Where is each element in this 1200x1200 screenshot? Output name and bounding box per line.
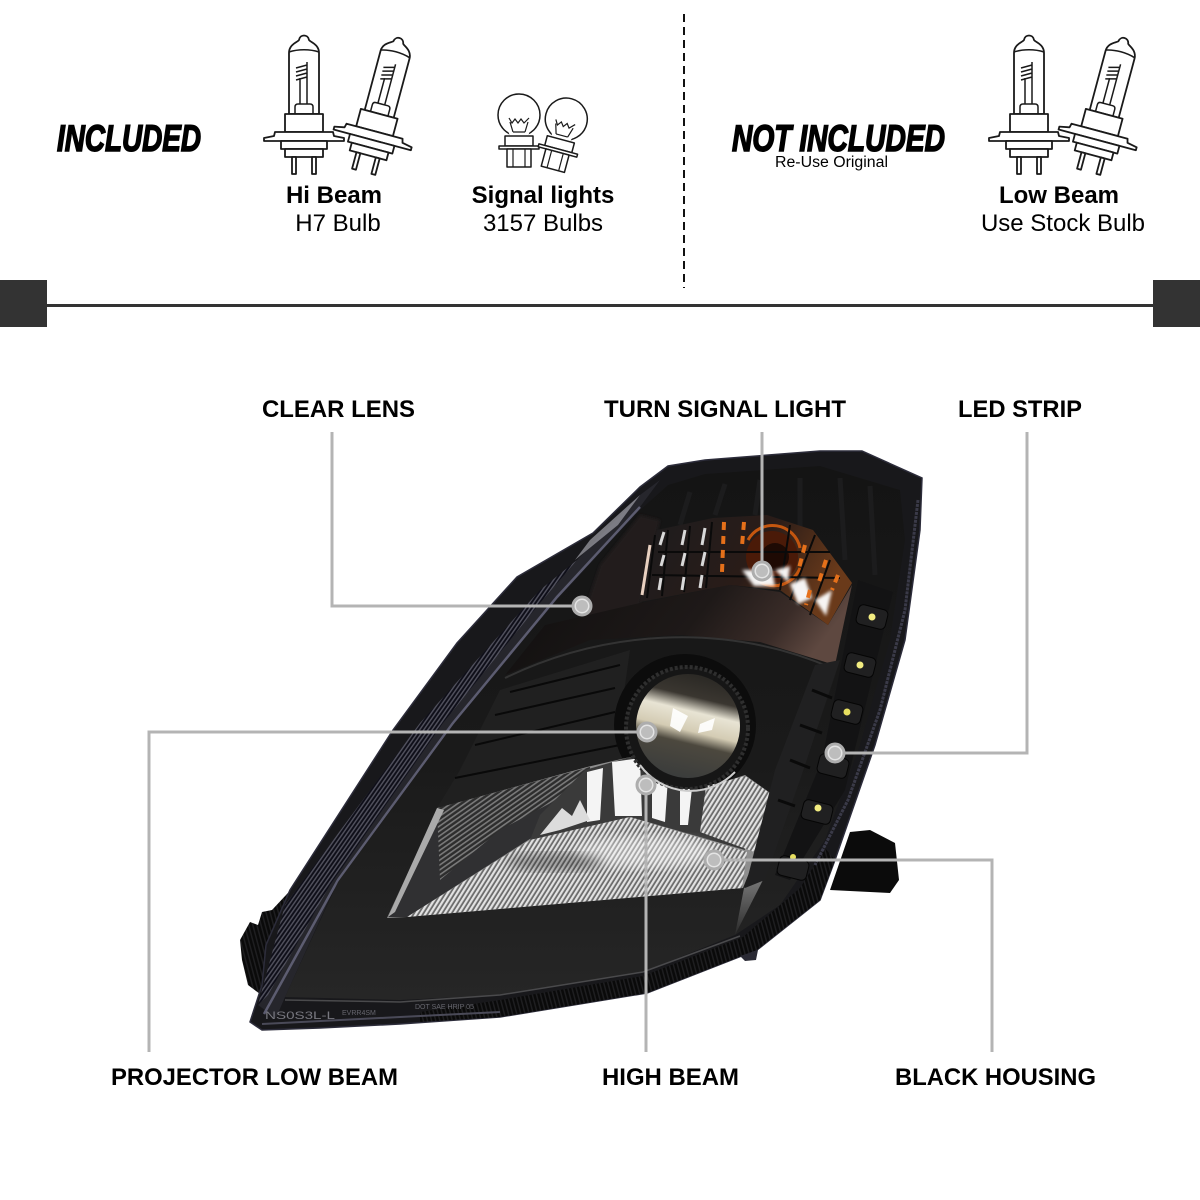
right rim highlight [815, 500, 918, 865]
lens tab [740, 950, 758, 961]
turn signal lens [640, 515, 852, 625]
brown curved band [505, 585, 852, 675]
clear lens strip outer band [258, 480, 660, 1018]
bottom lens highlight [262, 1012, 500, 1024]
icon: low beam H7 bulbs [989, 28, 1163, 182]
lower ribbed rim [420, 848, 835, 1022]
reflector lower stripes [407, 817, 747, 917]
label: low beam [981, 182, 1145, 237]
label: hi beam: Hi Beam [286, 182, 382, 209]
side panel steps [745, 660, 840, 888]
heading: not included: Re-Use Original [775, 154, 888, 171]
reflector chrome centre [530, 757, 745, 850]
dashed divider [683, 14, 685, 288]
rim light line [285, 936, 740, 1002]
callout: projector low beam [111, 723, 656, 1091]
black inner housing [285, 466, 905, 1000]
heading: included: INCLUDED [57, 118, 201, 159]
callout: black housing [705, 851, 1096, 1091]
callout: clear lens [262, 396, 591, 615]
label: hi beam [286, 182, 382, 237]
callout: turn signal light [604, 396, 846, 580]
rear connector [830, 830, 899, 893]
callout: high beam [602, 776, 739, 1091]
rear housing clip [240, 880, 300, 1000]
label: hi beam: H7 Bulb [295, 210, 381, 237]
ribbed panel [437, 650, 630, 808]
reflector left dark facet [388, 767, 590, 917]
projector lens [626, 667, 748, 791]
heading: not included [732, 118, 945, 171]
label: signal lights: Signal lights [472, 182, 614, 209]
upper bezel ribs [680, 478, 875, 575]
callout: projector low beam: PROJECTOR LOW BEAM [111, 1064, 398, 1091]
callout: turn signal light: TURN SIGNAL LIGHT [604, 396, 846, 423]
headlight illustration [240, 451, 922, 1030]
callout: black housing: BLACK HOUSING [895, 1064, 1096, 1091]
LED strip [775, 580, 893, 881]
grey wedge [735, 880, 763, 935]
label: signal lights: 3157 Bulbs [483, 210, 603, 237]
reflector [387, 757, 780, 918]
brown reflection left of signal [575, 515, 660, 640]
heading: not included: NOT INCLUDED [732, 118, 945, 159]
section divider bar [0, 280, 1200, 327]
callout: led strip: LED STRIP [958, 396, 1082, 423]
reflector right facet [700, 776, 780, 853]
icon: hi beam H7 bulbs [264, 28, 438, 182]
label: low beam: Use Stock Bulb [981, 210, 1145, 237]
headlight illustration: DOT SAE HRIP 05 [415, 1004, 474, 1011]
callout: high beam: HIGH BEAM [602, 1064, 739, 1091]
icon: signal 3157 bulbs [498, 93, 592, 175]
lens inner edge highlight [264, 507, 640, 1014]
outer lens shell [250, 451, 922, 1030]
projector surround [614, 654, 756, 796]
callout: led strip [826, 396, 1082, 762]
callout: clear lens: CLEAR LENS [262, 396, 415, 423]
headlight illustration: EVRR4SM [342, 1010, 376, 1017]
label: low beam: Low Beam [999, 182, 1119, 209]
etched markings: NS0S3L-L [265, 1010, 335, 1022]
curved bezel line [505, 637, 832, 678]
clear lens ribbed band [258, 560, 577, 1005]
label: signal lights [472, 182, 614, 237]
